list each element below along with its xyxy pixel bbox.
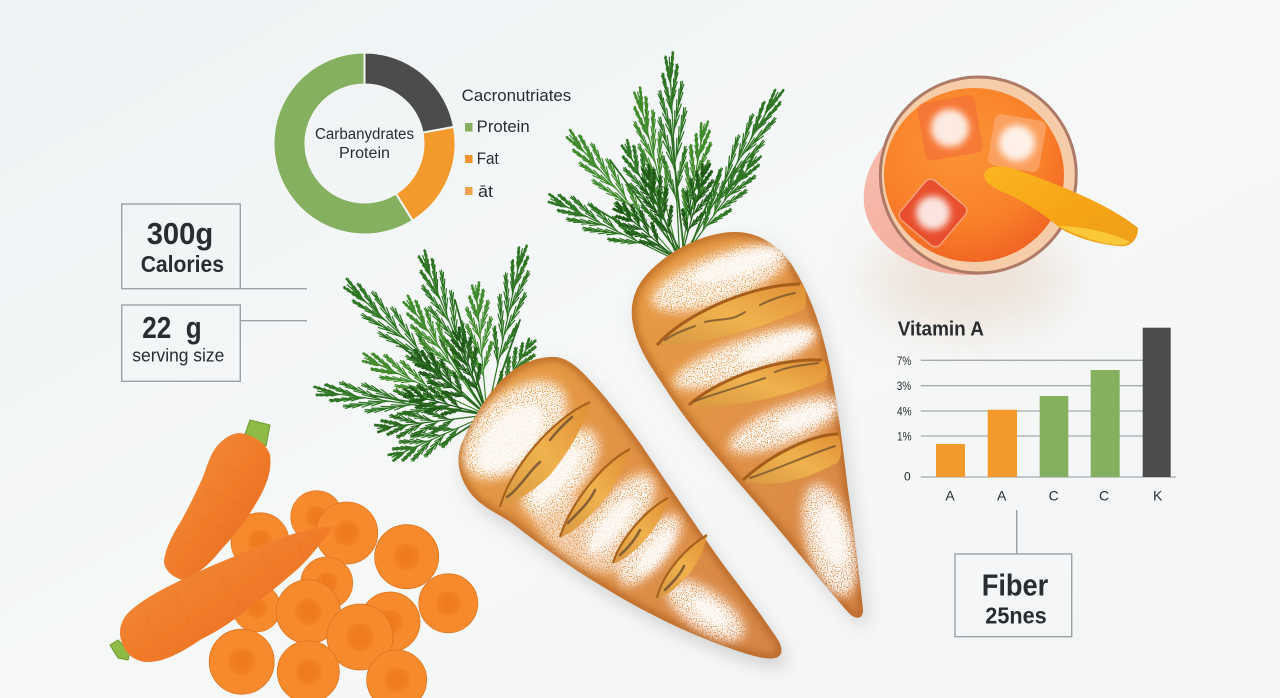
donut centre label [315, 126, 414, 162]
bread carrot: upper [632, 231, 868, 626]
callout: fiber [955, 510, 1072, 637]
x axis labels: A [997, 488, 1007, 504]
y axis labels [897, 354, 912, 484]
callout: fiber: Fiber [982, 568, 1048, 603]
legend title: Cacronutriates [462, 87, 571, 105]
donut segment: green [274, 52, 413, 234]
x axis labels: C [1049, 488, 1059, 504]
glass of carrot juice [864, 77, 1138, 330]
ice cube 3 [896, 176, 970, 250]
whole carrot: upper [164, 420, 270, 580]
y axis labels: 1% [897, 430, 912, 444]
x axis labels: C [1099, 488, 1109, 504]
ice cube 2 [987, 113, 1047, 173]
score marks [500, 402, 707, 598]
y axis labels: 7% [897, 354, 911, 368]
orange slice [984, 166, 1138, 246]
y axis labels: 4% [897, 404, 912, 418]
upper dill leaves [540, 50, 794, 276]
chart title: Vitamin A [898, 319, 984, 341]
bars [936, 328, 1171, 477]
gridlines and baseline [921, 360, 1176, 477]
infographic canvas [109, 50, 1176, 698]
carrot slices in front [209, 525, 478, 698]
bread carrot: lower [445, 357, 786, 667]
bar chart: vitamin A [897, 319, 1176, 504]
callout: fiber: 25nes [985, 602, 1047, 628]
carrot slices behind the whole carrot [231, 491, 378, 632]
callout: serving size [122, 305, 307, 381]
panel: macronutrients donut chart [274, 52, 456, 234]
lower dill leaves [310, 240, 545, 472]
score marks [657, 284, 841, 484]
callout: calories: 300g [147, 216, 213, 251]
legend: macronutrients [462, 87, 571, 201]
ice cube 1 [916, 94, 984, 162]
donut segment: orange [396, 127, 456, 221]
x axis labels: K [1153, 488, 1163, 504]
x axis labels [945, 488, 1163, 504]
callout: serving size: serving size [132, 346, 224, 366]
donut centre label: Carbanydrates [315, 126, 414, 143]
legend item: garbled fat: āt [478, 183, 493, 201]
whole carrot: lower [110, 527, 332, 662]
y axis labels: 3% [897, 379, 911, 393]
callout: calories: Calories [141, 251, 224, 277]
donut segment: dark [364, 52, 454, 133]
legend item: fat: Fat [477, 150, 499, 168]
legend item: protein: Protein [477, 118, 530, 136]
callout: calories [122, 204, 307, 289]
donut centre label: Protein [339, 145, 390, 162]
callout: serving size: 22 g [142, 310, 202, 345]
y axis labels: 0 [904, 470, 911, 484]
x axis labels: A [945, 488, 955, 504]
